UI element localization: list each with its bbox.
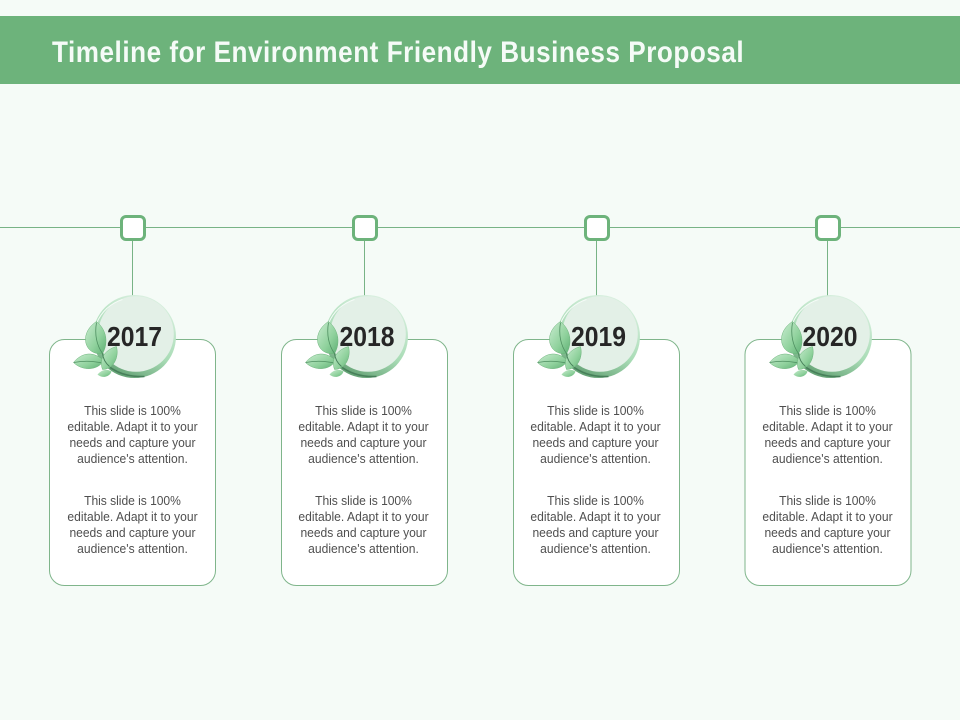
text block 2020 bottom — [762, 494, 893, 556]
card 2019 — [514, 340, 680, 586]
text block 2019 top: needs and capture your — [532, 436, 659, 450]
marker 2017 — [122, 216, 144, 240]
text block 2020 top — [762, 404, 893, 466]
text block 2019 top: audience's attention. — [540, 452, 651, 466]
text block 2017 bottom: needs and capture your — [69, 526, 196, 540]
timeline line — [0, 226, 960, 228]
text block 2018 top — [298, 404, 429, 466]
text block 2017 top — [67, 404, 198, 466]
text block 2018 bottom: needs and capture your — [300, 526, 427, 540]
text block 2019 bottom: editable. Adapt it to your — [530, 510, 661, 524]
timeline column: 2017 — [50, 216, 216, 586]
text block 2017 bottom — [67, 494, 198, 556]
year 2017: 2017 — [107, 321, 162, 352]
card 2018 — [282, 340, 448, 586]
marker 2019 — [586, 216, 608, 240]
text block 2017 top: editable. Adapt it to your — [67, 420, 198, 434]
text block 2018 bottom: audience's attention. — [308, 542, 419, 556]
leaf medallion 2018 — [306, 295, 408, 378]
text block 2019 bottom: needs and capture your — [532, 526, 659, 540]
text block 2018 top: audience's attention. — [308, 452, 419, 466]
connector 2017 — [132, 240, 134, 297]
leaf medallion 2019 — [538, 295, 640, 378]
leaf medallion 2020 — [770, 295, 872, 378]
year 2018: 2018 — [340, 321, 394, 352]
text block 2018 top: This slide is 100% — [315, 404, 412, 418]
marker 2020 — [816, 216, 840, 240]
text block 2020 top: editable. Adapt it to your — [762, 420, 893, 434]
text block 2020 bottom: needs and capture your — [764, 526, 891, 540]
text block 2018 bottom — [298, 494, 429, 556]
text block 2017 bottom: This slide is 100% — [84, 494, 181, 508]
text block 2019 top: editable. Adapt it to your — [530, 420, 661, 434]
connector 2019 — [596, 240, 598, 297]
text block 2018 top: editable. Adapt it to your — [298, 420, 429, 434]
title banner — [0, 16, 960, 84]
card 2020 — [745, 340, 911, 586]
text block 2017 bottom: audience's attention. — [77, 542, 188, 556]
connector 2020 — [826, 240, 828, 297]
text block 2019 bottom — [530, 494, 661, 556]
text block 2019 top: This slide is 100% — [547, 404, 644, 418]
text block 2017 top: needs and capture your — [69, 436, 196, 450]
connector 2018 — [364, 240, 366, 297]
marker 2018 — [354, 216, 376, 240]
text block 2020 top: This slide is 100% — [779, 404, 876, 418]
text block 2019 bottom: audience's attention. — [540, 542, 651, 556]
text block 2017 top: This slide is 100% — [84, 404, 181, 418]
year 2019: 2019 — [571, 321, 626, 352]
text block 2019 bottom: This slide is 100% — [547, 494, 644, 508]
text block 2020 bottom: editable. Adapt it to your — [762, 510, 893, 524]
text block 2018 bottom: editable. Adapt it to your — [298, 510, 429, 524]
card 2017 — [50, 340, 216, 586]
text block 2018 top: needs and capture your — [300, 436, 427, 450]
text block 2020 bottom: This slide is 100% — [779, 494, 876, 508]
timeline column: 2019 — [514, 216, 680, 586]
timeline column: 2018 — [282, 216, 448, 586]
timeline column: 2020 — [745, 216, 911, 586]
year 2020: 2020 — [802, 321, 858, 352]
text block 2018 bottom: This slide is 100% — [315, 494, 412, 508]
text block 2020 top: audience's attention. — [772, 452, 883, 466]
text block 2017 top: audience's attention. — [77, 452, 188, 466]
text block 2019 top — [530, 404, 661, 466]
text block 2017 bottom: editable. Adapt it to your — [67, 510, 198, 524]
title: Timeline for Environment Friendly Business Proposal — [52, 35, 744, 68]
leaf medallion 2017 — [74, 295, 176, 378]
text block 2020 top: needs and capture your — [764, 436, 891, 450]
text block 2020 bottom: audience's attention. — [772, 542, 883, 556]
